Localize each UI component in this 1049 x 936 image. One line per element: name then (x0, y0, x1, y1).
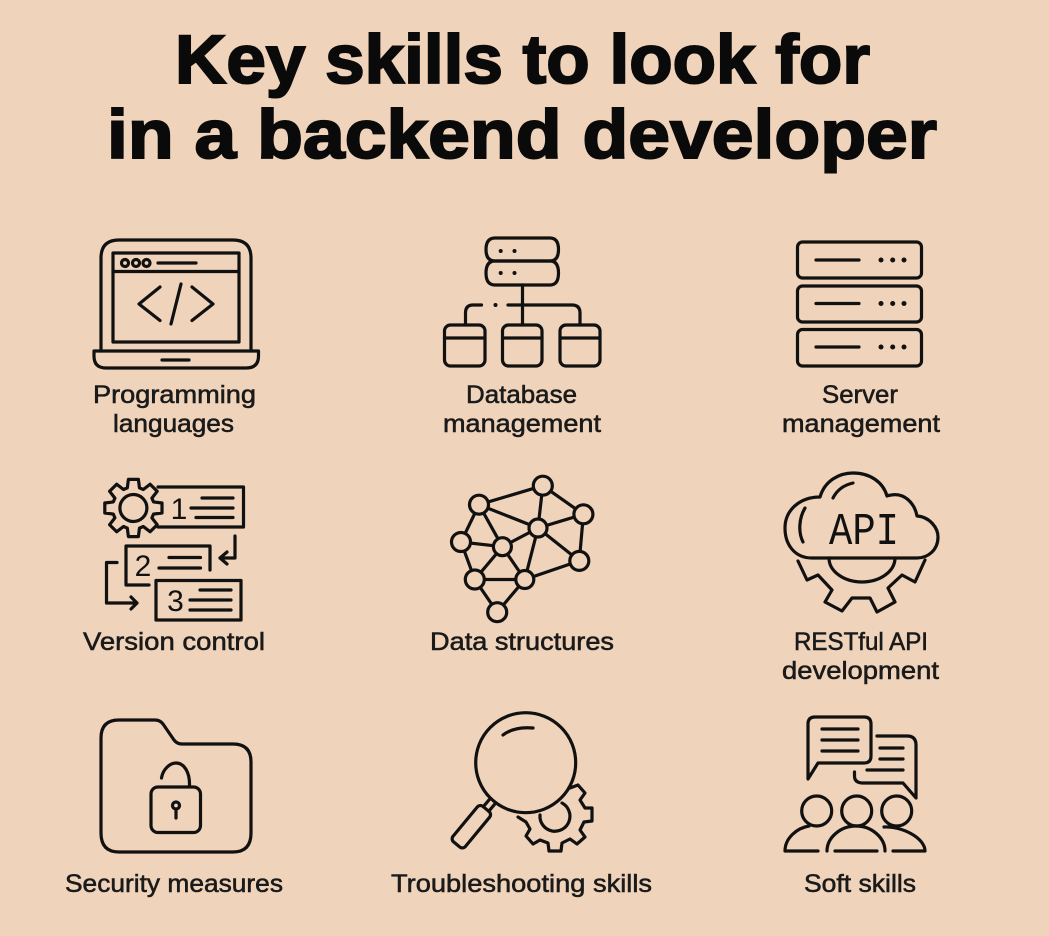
label: database management (443, 381, 601, 438)
label: database management: management (443, 410, 601, 438)
icon: version control steps: 1 (171, 493, 187, 526)
icon: server stack (798, 242, 922, 366)
icon: version control steps (105, 479, 244, 620)
title (107, 21, 937, 173)
label: programming languages: languages (113, 410, 234, 438)
label: programming languages (93, 381, 256, 438)
label: server management: Server (822, 381, 898, 409)
label: soft skills: Soft skills (804, 870, 916, 898)
label: RESTful API development: RESTful API (794, 628, 928, 656)
icon: folder with padlock (101, 720, 251, 852)
label: database management: Database (466, 381, 577, 409)
label: server management (782, 381, 940, 438)
label: server management: management (782, 410, 940, 438)
icon: data structure network (452, 476, 593, 622)
title: Key skills to look for (175, 21, 870, 98)
icon: magnifier with gear (451, 713, 592, 851)
label: programming languages: Programming (93, 381, 256, 409)
icon: API cloud with gear (785, 473, 938, 612)
title: in a backend developer (107, 96, 937, 173)
icon: laptop with code (94, 240, 258, 368)
icon: people with chat bubbles (785, 717, 925, 851)
icon: database hierarchy (444, 238, 600, 366)
label: RESTful API development (782, 628, 939, 685)
icon: API cloud with gear: API (829, 507, 899, 558)
icon: version control steps: 2 (135, 550, 151, 583)
label: RESTful API development: development (782, 657, 939, 685)
label: security measures: Security measures (65, 870, 283, 898)
label: troubleshooting skills: Troubleshooting skills (391, 870, 652, 898)
label: data structures: Data structures (430, 628, 614, 656)
label: version control: Version control (83, 628, 265, 656)
icon: version control steps: 3 (167, 585, 184, 618)
